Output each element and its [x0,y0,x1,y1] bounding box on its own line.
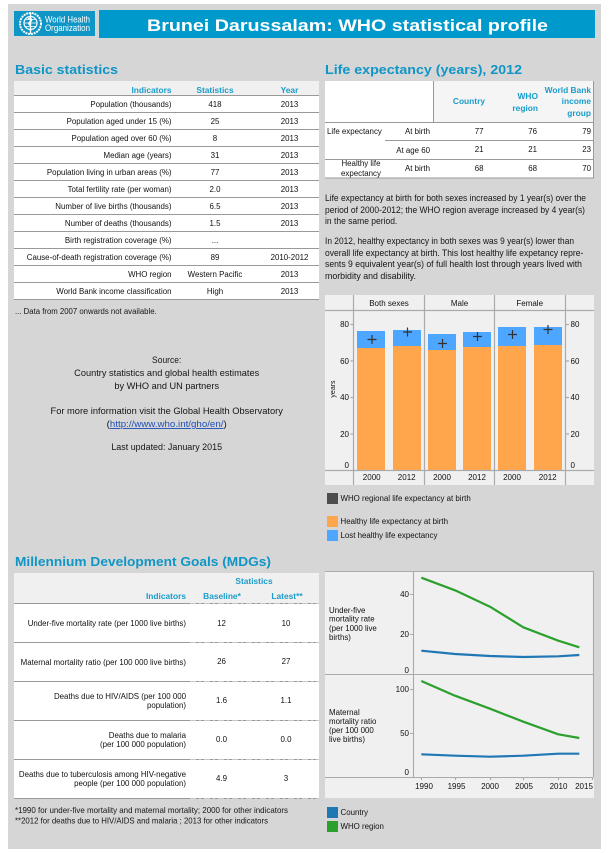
axis labels: 2000 [433,473,451,482]
table header: Indicators [131,85,172,95]
heading: life expectancy: Life expectancy (years), 2012 [325,62,522,77]
axis labels: 80 [570,320,580,329]
table: life expectancy: 21 [475,145,484,154]
table: MDGs: Deaths due to HIV/AIDS (per 100 000 [54,692,187,701]
table: basic statistics: Number of deaths (thousands) [65,219,172,228]
table: basic statistics: WHO region [128,270,172,279]
table: life expectancy: expectancy [341,169,381,178]
table: basic statistics: 2013 [281,168,299,177]
axis labels: 100 [396,685,410,694]
source block: Source: [152,355,181,365]
table: MDGs: Deaths due to malaria [109,731,187,740]
axis labels: 40 [400,590,410,599]
source block: Country statistics and global health estimates [74,368,260,378]
legend: MDG trends: Country [340,808,368,817]
table: basic statistics: 77 [211,168,219,177]
axis labels: 20 [400,630,410,639]
chart label: maternal: mortality ratio [329,717,377,726]
legend: MDG trends: WHO region [340,822,384,831]
axis labels: 2012 [468,473,486,482]
axis labels: 0 [405,666,410,675]
footnotes: MDG table: *1990 for under-five mortality and maternal mortality; 2000 for other indicators [15,806,288,815]
WHO logo: World Health [45,14,90,24]
chart label: under-five: births) [329,633,351,642]
table: basic statistics [14,81,319,300]
text block: life expectancy commentary: Life expectancy at birth for both sexes increased by 1 year(s) over the [325,193,586,203]
table header [146,576,303,601]
axis labels: 40 [340,393,350,402]
table header: World Bank [545,85,591,95]
table: basic statistics: 2013 [281,219,299,228]
table: MDGs: 4.9 [216,774,228,783]
table: MDGs: 3 [284,774,289,783]
table header: Indicators [146,591,186,601]
WHO logo [14,11,95,36]
table: life expectancy: At birth [405,127,430,136]
table: basic statistics: Population aged under 15 (%) [67,117,172,126]
table: MDGs: 1.1 [281,696,291,705]
table header: Country [453,96,485,106]
WHO logo: Organization [45,23,90,33]
table: MDGs: 1.6 [216,696,228,705]
table: life expectancy: 21 [528,145,537,154]
table: basic statistics: 2013 [281,287,299,296]
table header: Statistics [235,576,273,586]
panel labels [369,299,544,308]
legend: life expectancy chart: WHO regional life expectancy at birth [340,494,471,503]
table: life expectancy: Healthy life [341,159,381,168]
table: basic statistics: 2013 [281,151,299,160]
axis labels: 20 [340,430,350,439]
chart label: maternal [329,708,377,744]
table: basic statistics: 25 [211,117,220,126]
source block: Last updated: January 2015 [111,442,222,452]
table header: Statistics [196,85,234,95]
table: MDGs: 27 [282,657,290,666]
axis labels [396,590,593,791]
table: life expectancy: Life expectancy [327,127,382,136]
panel labels: Both sexes [369,299,409,308]
legend: life expectancy chart [327,493,471,541]
footnotes: MDG table [15,806,288,826]
table header: Latest** [271,591,303,601]
table: basic statistics: 2013 [281,202,299,211]
text block: life expectancy commentary: in the same period. [325,216,397,226]
lost healthy life expectancy bars [357,327,562,350]
table: life expectancy: 23 [582,145,592,154]
table: basic statistics: 2.0 [210,185,221,194]
table: basic statistics: 2013 [281,134,299,143]
table: basic statistics: Median age (years) [104,151,172,160]
table: MDGs: (per 100 000 population) [100,740,186,749]
table: life expectancy: At age 60 [396,146,431,155]
axis labels: 80 [340,320,350,329]
text block: life expectancy commentary [325,193,586,281]
line charts: MDG trends [325,571,594,798]
table header: group [567,108,591,118]
table: life expectancy: 77 [475,127,484,136]
legend: MDG trends [327,807,384,832]
axis labels [330,320,580,482]
table: basic statistics: 89 [211,253,220,262]
chart: under-five mortality rate [421,578,579,657]
axis labels: 2012 [539,473,557,482]
table: basic statistics: 2013 [281,185,299,194]
axis labels: 2000 [503,473,521,482]
table: MDGs: people (per 100 000 population) [74,779,186,788]
table: basic statistics: 31 [211,151,219,160]
table: life expectancy: 76 [528,127,538,136]
table header [453,85,591,118]
axis labels: 2012 [398,473,416,482]
table header: Baseline* [203,591,242,601]
table: MDGs: Under-five mortality rate (per 1000 live births) [28,619,186,628]
healthy life expectancy bars [357,345,562,470]
table: basic statistics: 2013 [281,117,299,126]
table: basic statistics: 8 [213,134,218,143]
table header: region [512,103,538,113]
table: basic statistics: ... [212,236,218,245]
table: basic statistics: Total fertility rate (per woman) [68,185,172,194]
chart label: under-five: mortality rate [329,614,375,624]
table: MDGs: 26 [217,657,226,666]
table: basic statistics: 418 [208,100,222,109]
table: basic statistics: Population (thousands) [90,100,172,109]
source block: by WHO and UN partners [114,381,219,391]
table: basic statistics: Population aged over 60 (%) [71,134,172,143]
bar chart: life expectancy by sex [325,295,594,485]
chart label: maternal: live births) [329,735,365,744]
text block: life expectancy commentary: period of 2000-2012; the WHO region average increased by 4 year(s) [325,205,585,215]
table: basic statistics: 2010-2012 [271,253,308,262]
table: life expectancy: 79 [582,127,592,136]
table header: WHO [518,91,538,101]
title banner [99,10,595,38]
table: basic statistics: Population living in urban areas (%) [47,168,172,177]
footnotes: MDG table: **2012 for deaths due to HIV/AIDS and malaria ; 2013 for other indicators [15,816,268,826]
table: basic statistics: Birth registration coverage (%) [65,236,172,245]
heading: MDGs: Millennium Development Goals (MDGs) [15,554,271,569]
table: life expectancy: 68 [528,164,538,173]
table: basic statistics: 2013 [281,270,299,279]
table: MDGs: 12 [217,619,226,628]
table: MDGs: Maternal mortality ratio (per 100 000 live births) [21,658,186,667]
axis labels: 1995 [448,782,466,791]
legend: life expectancy chart: Healthy life expectancy at birth [340,517,448,526]
table: basic statistics: High [207,287,223,296]
source block: (http://www.who.int/gho/en/ ) [107,419,227,429]
table: MDGs: 0.0 [281,735,292,744]
axis labels: 60 [570,357,580,366]
chart label: under-five: (per 1000 live [329,624,377,633]
source block [51,355,283,452]
legend: life expectancy chart: Lost healthy life expectancy [340,531,437,540]
axis labels: 0 [405,768,410,777]
axis labels: years [330,380,337,398]
table: MDGs: Deaths due to tuberculosis among HIV-negative [19,770,187,779]
chart label: maternal: (per 100 000 [329,726,374,735]
WHO regional markers [368,325,552,348]
table header [131,85,299,95]
table header: Year [281,85,299,95]
table: basic statistics: 6.5 [210,202,221,211]
table header: income [562,96,591,106]
heading: basic statistics: Basic statistics [15,62,118,77]
axis labels: 2005 [515,782,533,791]
axis labels: 20 [570,430,580,439]
table: life expectancy [325,81,594,178]
icon: WHO emblem [20,13,41,34]
source block: For more information visit the Global Health Observatory [51,406,283,416]
table: basic statistics: World Bank income classification [56,287,172,296]
table: basic statistics: Cause-of-death registration coverage (%) [27,253,172,262]
table: basic statistics: 2013 [281,100,299,109]
axis labels: 2000 [481,782,499,791]
table: MDGs: 0.0 [216,735,228,744]
axis labels: 0 [570,461,576,470]
axis labels: 40 [570,393,580,402]
table: life expectancy: 70 [582,164,592,173]
chart label: maternal: Maternal [329,708,360,717]
text block: life expectancy commentary: morbidity and disability. [325,271,416,281]
table: basic statistics: Number of live births (thousands) [55,202,172,211]
text block: life expectancy commentary: overall life expectancy at birth. This lost healthy life expetancy repre- [325,248,583,258]
table: MDGs: 10 [282,619,291,628]
table: MDGs: population) [147,701,186,710]
axis labels: 2000 [363,473,381,482]
table: basic statistics: 1.5 [210,219,221,228]
axis labels: 60 [340,357,350,366]
chart: maternal mortality ratio [421,681,579,757]
axis labels: 2015 [575,782,593,791]
table: life expectancy: At birth [405,164,430,173]
text block: life expectancy commentary: sents 9 equivalent year(s) of full health lost through years lived with [325,259,582,269]
panel labels: Male [451,299,469,308]
text block: life expectancy commentary: In 2012, healthy expectancy in both sexes was 9 year(s) lower than [325,236,574,246]
axis labels: 50 [400,729,410,738]
table: basic statistics: Western Pacific [188,270,242,279]
panel labels: Female [516,299,544,308]
table: life expectancy: 68 [475,164,484,173]
axis labels: 2010 [550,782,568,791]
title banner: Brunei Darussalam: WHO statistical profile [147,17,548,35]
axis labels: 1990 [415,782,433,791]
footnote: data availability: ... Data from 2007 onwards not available. [15,307,157,316]
chart label: under-five: Under-five [329,606,366,615]
axis labels: 0 [345,461,350,470]
table: MDGs [14,573,319,798]
chart label: under-five [329,606,377,642]
